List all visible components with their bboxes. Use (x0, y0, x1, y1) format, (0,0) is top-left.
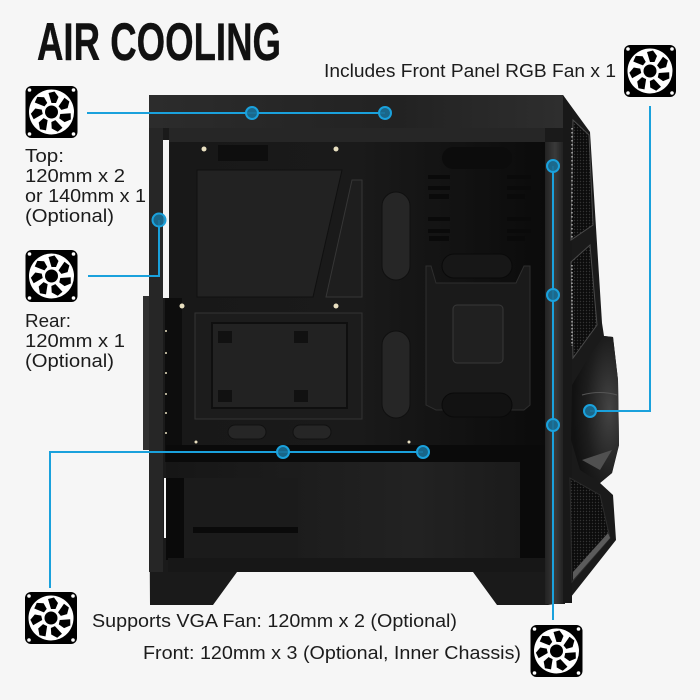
label: VGA fan: Supports VGA Fan: 120mm x 2 (Optional) (92, 611, 457, 631)
label: rear fan: (Optional) (25, 351, 114, 371)
left pillar (149, 128, 163, 572)
top panel (149, 95, 563, 128)
PC case (143, 95, 619, 605)
middle mesh (571, 245, 597, 358)
screws (165, 146, 410, 444)
label: front panel fan: Includes Front Panel RGB Fan x 1 (324, 61, 616, 81)
label: top fans: (Optional) (25, 206, 114, 226)
PSU shroud (166, 462, 520, 558)
callout dots (152, 107, 596, 458)
upper mesh (571, 120, 593, 240)
icon: front fan (530, 625, 582, 677)
icon: top fan (26, 86, 78, 138)
basement gap (166, 445, 546, 560)
lower plate (195, 313, 362, 419)
right post (545, 142, 565, 604)
right vents and plate (442, 147, 512, 169)
title: AIR COOLING (37, 13, 281, 72)
callout lines (50, 106, 650, 620)
upper plate (197, 170, 342, 297)
icon: rear fan (26, 250, 78, 302)
label: rear fan (25, 311, 125, 371)
label: rear fan: Rear: (25, 311, 71, 331)
label: top fans: 120mm x 2 (25, 166, 125, 186)
white gaps (163, 140, 169, 298)
label: rear fan: 120mm x 1 (25, 331, 125, 351)
ovals (382, 192, 410, 280)
icon: front panel fan (624, 45, 676, 97)
fan bulge (571, 336, 619, 483)
icon: VGA fan (25, 592, 77, 644)
label: top fans: Top: (25, 146, 64, 166)
label: front fans: Front: 120mm x 3 (Optional, Inner Chassis) (143, 643, 521, 663)
interior back panel (170, 142, 545, 462)
label: top fans (25, 146, 146, 226)
case silhouette (143, 95, 619, 605)
lower mesh (570, 478, 610, 582)
label: top fans: or 140mm x 1 (25, 186, 146, 206)
